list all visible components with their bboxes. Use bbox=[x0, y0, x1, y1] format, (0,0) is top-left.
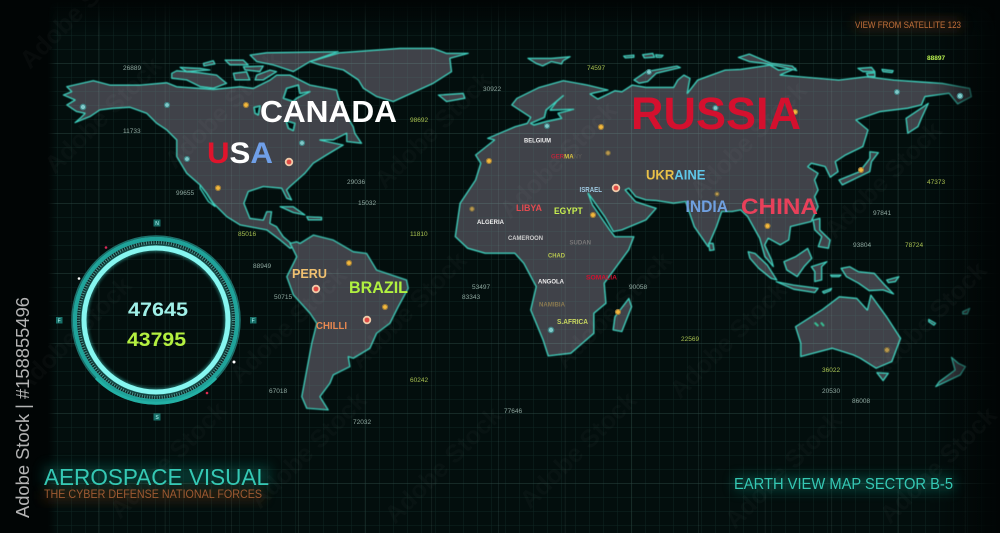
scattered data numbers: 53497 bbox=[472, 284, 490, 291]
scattered data numbers: 98692 bbox=[410, 117, 428, 124]
scattered data numbers: 15032 bbox=[358, 200, 376, 207]
gauge readings: 47645 bbox=[128, 299, 188, 321]
country labels: RUSSIA bbox=[631, 88, 801, 139]
scattered data numbers: 50715 bbox=[274, 294, 292, 301]
country labels: CHILLI bbox=[316, 320, 347, 332]
gauge readings: 43795 bbox=[127, 329, 186, 351]
scattered data numbers: 29036 bbox=[347, 179, 365, 186]
country labels: CHAD bbox=[548, 252, 565, 260]
scattered data numbers: 78724 bbox=[905, 242, 923, 249]
country labels: SOMALIA bbox=[586, 274, 617, 282]
stock watermarks: Adobe Stock bbox=[549, 246, 677, 374]
country labels: ANGOLA bbox=[538, 278, 564, 286]
gauge tick boxes bbox=[56, 220, 256, 421]
scattered data numbers: 99655 bbox=[176, 190, 194, 197]
Eurasia and Africa bbox=[455, 53, 971, 356]
country labels: BRAZIL bbox=[349, 279, 408, 297]
stock watermarks: Adobe Stock bbox=[39, 51, 167, 179]
gauge tick boxes: F bbox=[252, 318, 255, 324]
country labels: GERMANY bbox=[551, 154, 583, 160]
country labels: INDIA bbox=[686, 198, 728, 216]
stock watermarks: Adobe Stock bbox=[244, 386, 372, 514]
scattered data numbers: 77646 bbox=[504, 408, 522, 415]
gauge readings bbox=[127, 299, 188, 351]
country labels: ALGERIA bbox=[477, 219, 504, 226]
Southeast Asia and Oceania bbox=[613, 248, 970, 387]
location markers bbox=[80, 70, 963, 352]
stock watermarks: Adobe Stock bbox=[9, 271, 137, 399]
scattered data numbers: 11733 bbox=[123, 128, 141, 135]
stock watermarks: Adobe Stock bbox=[369, 66, 497, 194]
scattered data numbers: 88897 bbox=[927, 55, 945, 62]
satellite label: VIEW FROM SATELLITE 123 bbox=[855, 20, 961, 31]
scattered data numbers: 47373 bbox=[927, 179, 945, 186]
title block: THE CYBER DEFENSE NATIONAL FORCES bbox=[44, 487, 262, 501]
country labels: PERU bbox=[292, 267, 327, 281]
stock watermarks: Adobe Stock bbox=[819, 116, 947, 244]
gauge accent dots bbox=[78, 246, 236, 394]
stock watermarks: Adobe Stock bbox=[159, 46, 287, 174]
gauge tick boxes: F bbox=[58, 318, 61, 324]
scattered data numbers: 85016 bbox=[238, 231, 256, 238]
country labels: NAMIBIA bbox=[539, 302, 565, 308]
scattered data numbers: 93804 bbox=[853, 242, 871, 249]
scattered data numbers: 86008 bbox=[852, 398, 870, 405]
title block bbox=[44, 464, 270, 501]
stock ID vertical text: Adobe Stock | #158855496 bbox=[12, 297, 33, 518]
North America and Arctic bbox=[63, 48, 468, 248]
gauge tick boxes: S bbox=[155, 415, 159, 421]
circular HUD gauge bbox=[56, 220, 256, 421]
country labels: SUDAN bbox=[570, 240, 591, 246]
scattered data numbers: 26889 bbox=[123, 65, 141, 72]
stock watermarks: Adobe Stock bbox=[719, 406, 847, 533]
stock watermarks: Adobe Stock bbox=[494, 96, 622, 224]
country labels: CAMEROON bbox=[508, 235, 543, 242]
stock watermarks: Adobe Stock bbox=[104, 396, 232, 524]
scattered data numbers: 60242 bbox=[410, 377, 428, 384]
country labels: CHINA bbox=[741, 194, 818, 219]
South America bbox=[287, 235, 408, 410]
country labels: BELGIUM bbox=[524, 138, 551, 144]
scattered data numbers: 36022 bbox=[822, 367, 840, 374]
scattered data numbers: 11810 bbox=[410, 231, 428, 238]
stock watermarks: Adobe Stock bbox=[864, 256, 992, 384]
country labels: EGYPT bbox=[554, 206, 583, 217]
stock watermarks: Adobe Stock bbox=[224, 261, 352, 389]
stock watermarks: Adobe Stock bbox=[664, 276, 792, 404]
scattered data numbers: 67018 bbox=[269, 388, 287, 395]
stock watermarks: Adobe Stock bbox=[684, 76, 812, 204]
country labels: USA bbox=[207, 137, 273, 170]
country labels: ISRAEL bbox=[580, 187, 603, 194]
scattered data numbers: 74597 bbox=[587, 65, 605, 72]
country labels bbox=[207, 88, 818, 332]
gauge rings bbox=[72, 236, 240, 404]
country labels: CANADA bbox=[260, 94, 397, 129]
stock watermarks: Adobe Stock bbox=[874, 401, 1000, 529]
stock watermarks: Adobe Stock bbox=[379, 401, 507, 529]
scattered data numbers: 97841 bbox=[873, 210, 891, 217]
country labels: UKRAINE bbox=[646, 166, 706, 182]
country labels: LIBYA bbox=[516, 203, 542, 214]
stock watermarks: Adobe Stock bbox=[344, 246, 472, 374]
scattered data numbers: 20530 bbox=[822, 388, 840, 395]
sector label: EARTH VIEW MAP SECTOR B-5 bbox=[734, 476, 953, 493]
gauge tick boxes: N bbox=[155, 221, 159, 227]
scattered data numbers: 88949 bbox=[253, 263, 271, 270]
scattered data numbers: 72032 bbox=[353, 419, 371, 426]
scattered data numbers bbox=[123, 55, 945, 426]
country labels: S.AFRICA bbox=[557, 319, 588, 326]
scattered data numbers: 83343 bbox=[462, 294, 480, 301]
scattered data numbers: 30922 bbox=[483, 86, 501, 93]
scattered data numbers: 90058 bbox=[629, 284, 647, 291]
world map bbox=[63, 48, 971, 410]
stock watermarks: Adobe Stock bbox=[514, 386, 642, 514]
scattered data numbers: 22569 bbox=[681, 336, 699, 343]
title block: AEROSPACE VISUAL bbox=[44, 464, 269, 490]
